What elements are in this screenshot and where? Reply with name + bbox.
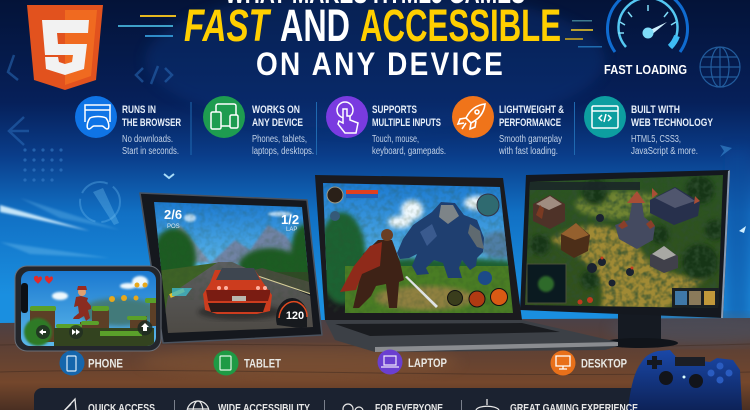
speed lines left <box>118 15 176 37</box>
device label: tablet <box>214 350 281 376</box>
decorative tech motifs <box>0 55 746 258</box>
feature: lightweight and performance: LIGHTWEIGHT & <box>499 104 564 116</box>
game scene: racing: 2/6 <box>164 207 182 222</box>
game controller <box>628 350 742 410</box>
feature: lightweight and performance: Smooth gameplay <box>499 134 562 145</box>
speedometer: fast loading <box>604 0 688 77</box>
game scene: platformer <box>21 270 160 346</box>
title <box>184 0 561 83</box>
feature: lightweight and performance <box>452 96 564 157</box>
runner character <box>73 296 91 321</box>
wooden table <box>0 314 750 410</box>
monitor <box>520 170 730 348</box>
feature: lightweight and performance: PERFORMANCE <box>499 117 561 129</box>
feature: runs in the browser <box>75 96 181 157</box>
feature: built with web technology <box>584 96 714 157</box>
feature: built with web technology: BUILT WITH <box>631 104 680 116</box>
feature: runs in the browser: Start in seconds. <box>122 146 179 157</box>
laptop <box>315 175 618 352</box>
icon: globe <box>700 47 740 87</box>
speed gauge: 120 <box>286 310 304 322</box>
speedometer: fast loading: FAST LOADING <box>604 63 687 77</box>
feature: works on any device <box>203 96 314 157</box>
feature: supports multiple inputs: Touch, mouse, <box>372 134 419 145</box>
game scene: racing: 1/2 <box>281 212 299 227</box>
feature: built with web technology: JavaScript & more. <box>631 146 698 157</box>
title: ACCESSIBLE <box>360 0 561 51</box>
title: FAST <box>184 0 272 51</box>
device label: laptop: LAPTOP <box>408 358 447 370</box>
feature: lightweight and performance: with fast loading. <box>498 146 558 157</box>
device label: phone: PHONE <box>88 358 123 370</box>
golem <box>397 202 484 278</box>
feature: runs in the browser: THE BROWSER <box>122 117 181 129</box>
feature: works on any device: laptops, desktops. <box>252 146 314 157</box>
benefit: for everyone <box>343 402 443 410</box>
speed lines right <box>565 20 602 48</box>
feature: supports multiple inputs: MULTIPLE INPUTS <box>372 117 441 129</box>
game scene: strategy village <box>525 175 723 308</box>
device label: desktop: DESKTOP <box>581 358 627 370</box>
red car <box>198 304 282 320</box>
phone <box>15 266 161 351</box>
tablet <box>140 193 322 343</box>
speed gauge <box>276 298 307 329</box>
benefits row <box>63 399 638 410</box>
feature: runs in the browser: RUNS IN <box>122 104 156 116</box>
feature: supports multiple inputs: keyboard, gamepads. <box>372 146 446 157</box>
benefit: wide accessibility <box>187 401 311 410</box>
feature: built with web technology: WEB TECHNOLOGY <box>631 117 714 129</box>
device label: laptop <box>378 350 447 374</box>
feature: works on any device: Phones, tablets, <box>252 134 307 145</box>
icon: number 5 <box>42 20 89 75</box>
game scene: racing <box>154 202 313 333</box>
HTML5 shield logo <box>27 5 103 90</box>
feature: runs in the browser: No downloads. <box>122 134 173 145</box>
feature: supports multiple inputs: SUPPORTS <box>372 104 417 116</box>
game scene: racing: POS <box>167 224 180 230</box>
benefit: quick access <box>63 399 155 410</box>
device label: desktop <box>550 350 627 376</box>
device label: phone <box>60 350 123 376</box>
feature: works on any device: ANY DEVICE <box>252 117 303 129</box>
feature row <box>75 96 714 157</box>
device label: tablet: TABLET <box>244 358 281 370</box>
hero <box>353 240 404 308</box>
title: AND <box>280 0 350 51</box>
game scene: hero versus golem <box>323 183 513 313</box>
feature: built with web technology: HTML5, CSS3, <box>631 134 681 145</box>
feature: works on any device: WORKS ON <box>252 104 300 116</box>
benefit: great gaming experience <box>476 399 638 410</box>
bottom bar panel <box>34 388 650 410</box>
feature: supports multiple inputs <box>326 96 446 157</box>
game scene: racing: LAP <box>286 227 297 233</box>
title: ON ANY DEVICE <box>256 47 503 83</box>
